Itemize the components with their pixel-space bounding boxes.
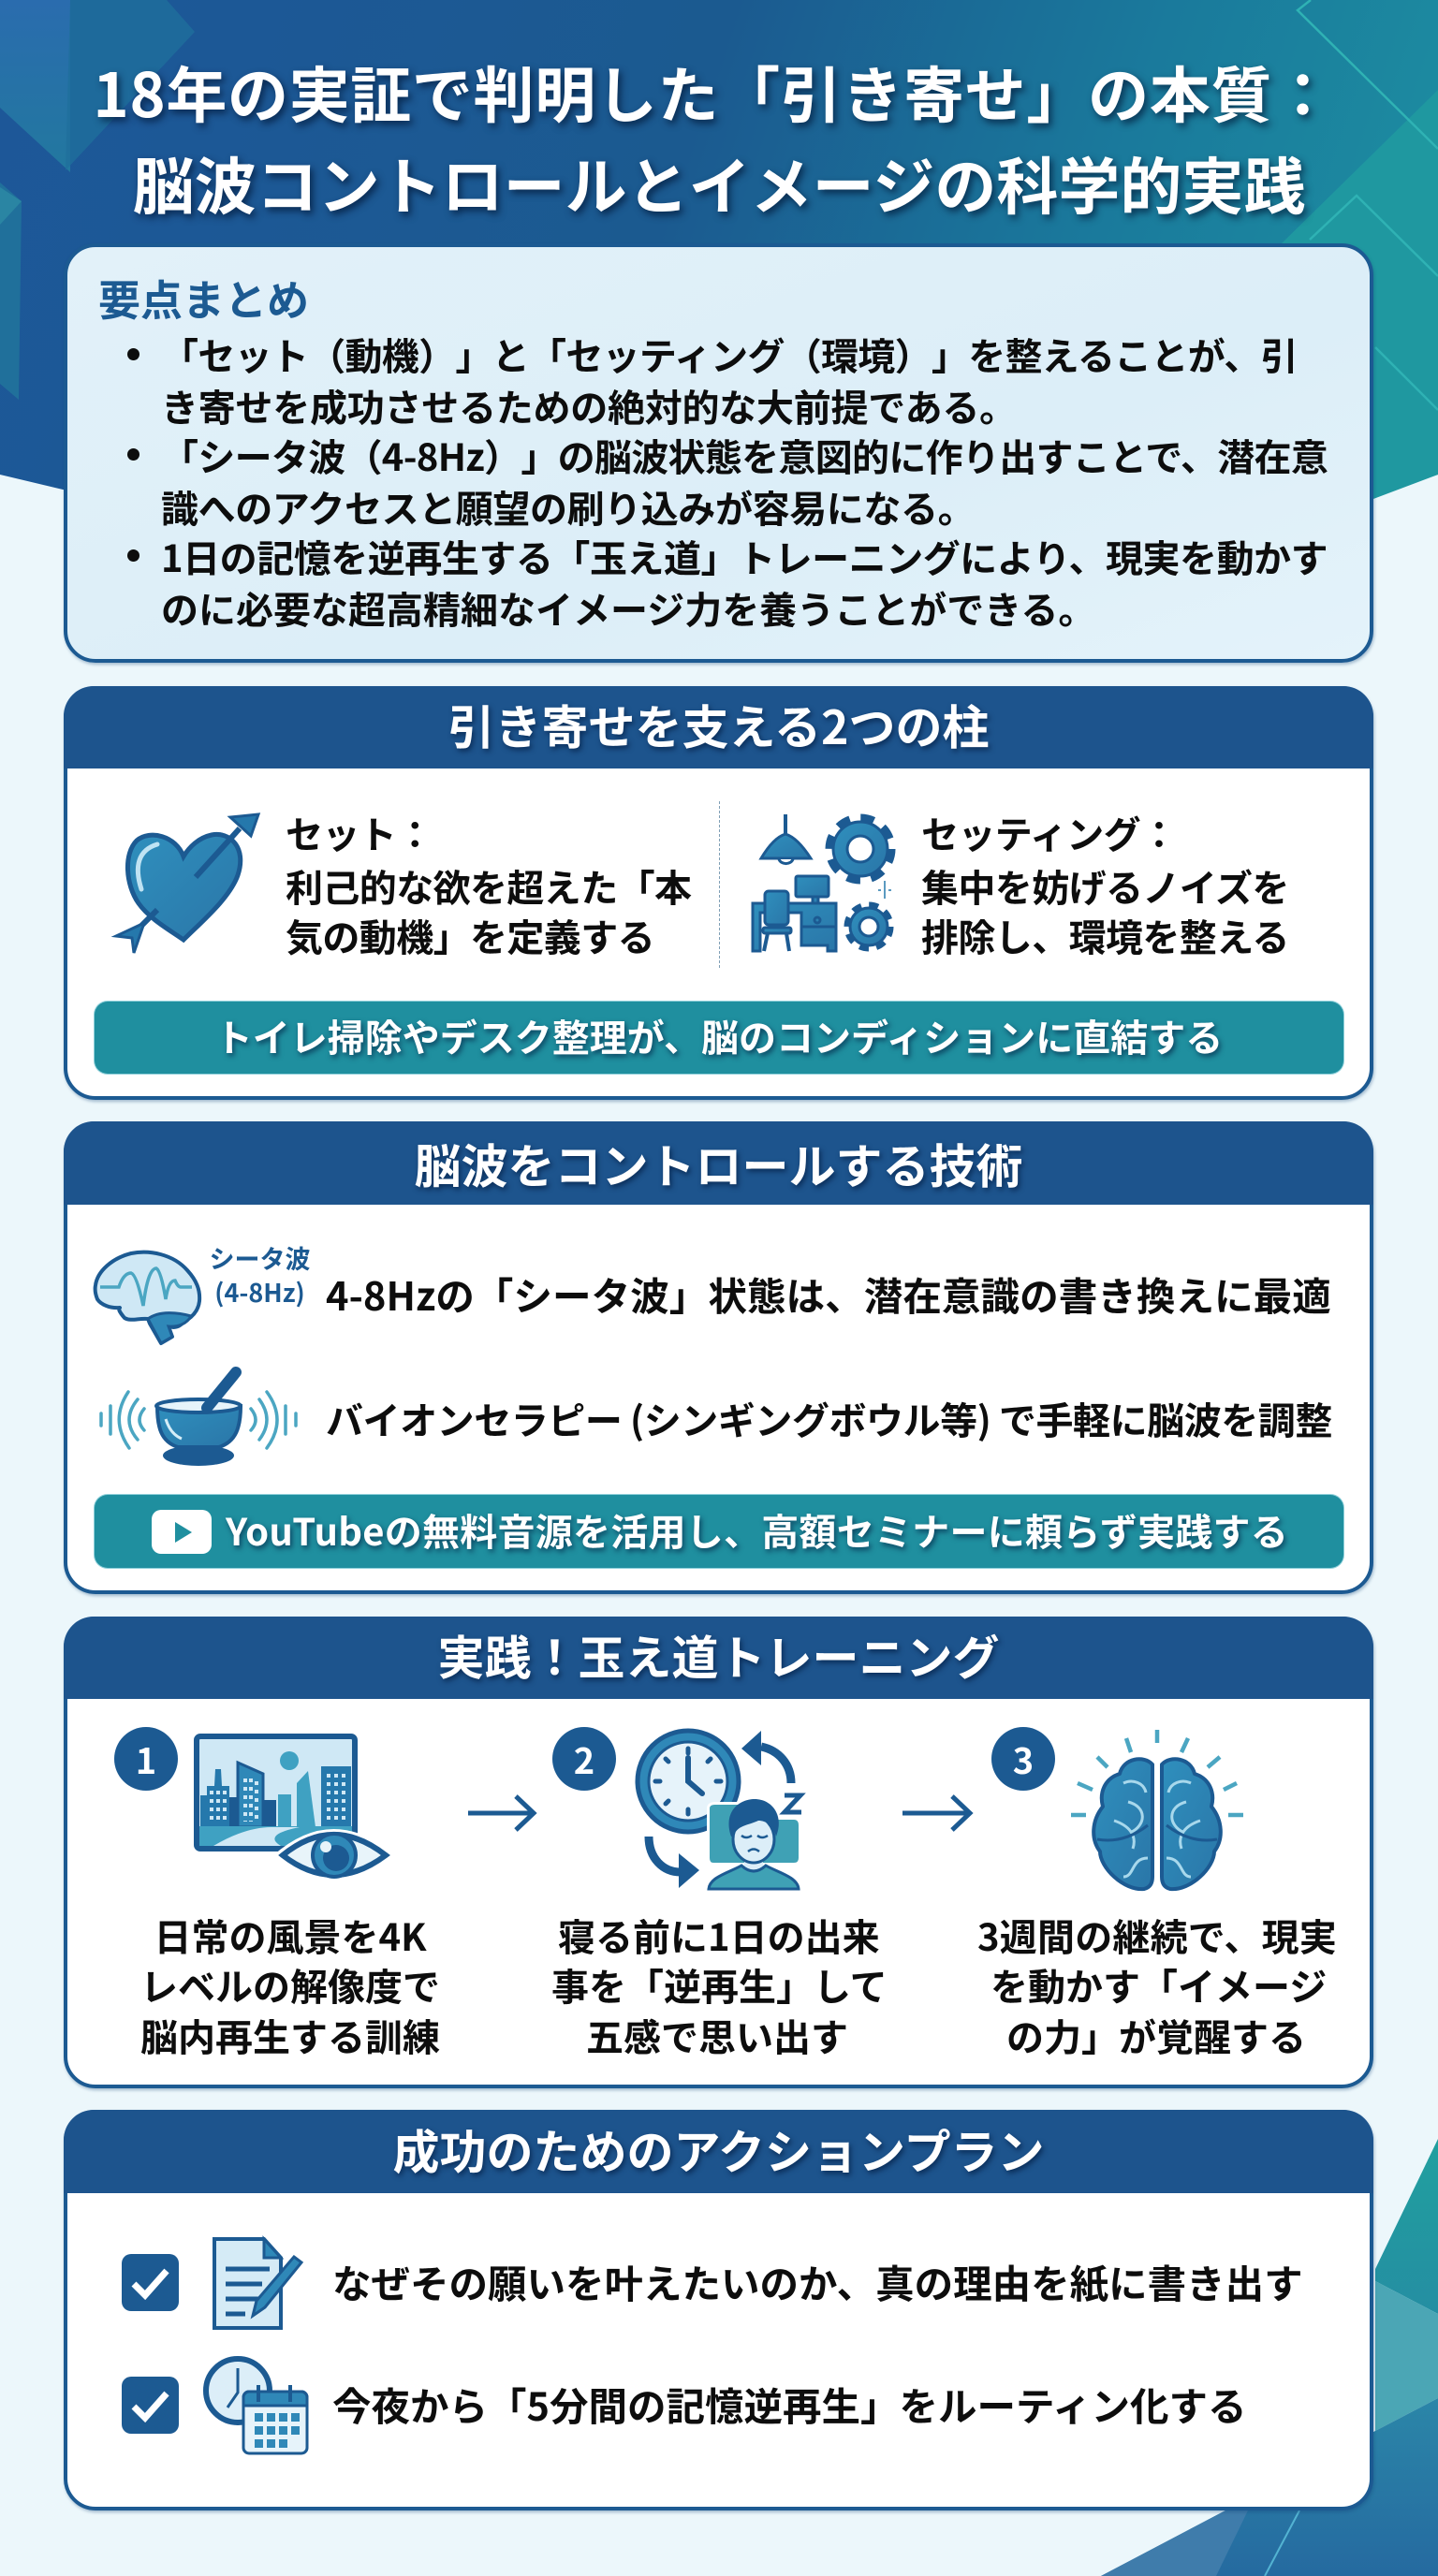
bullet list: 「シータ波（4-8Hz）」の脳波状態を意図的に作り出すことで、潜在意 xyxy=(161,428,1328,482)
badge 3: 3 xyxy=(1013,1733,1034,1784)
bullet list: 「セット（動機）」と「セッティング（環境）」を整えることが、引 xyxy=(161,327,1298,381)
pillar text: setting xyxy=(921,805,1289,962)
pillar text: set: 気の動機」を定義する xyxy=(286,908,654,962)
icon: play button xyxy=(152,1510,212,1554)
technique header: 脳波をコントロールする技術 xyxy=(414,1130,1022,1197)
action text 2: 今夜から「5分間の記憶逆再生」をルーティン化する xyxy=(332,2376,1247,2432)
pillar text: set: セット： xyxy=(286,805,433,859)
badge 2: 2 xyxy=(574,1733,594,1784)
title: 脳波コントロールとイメージの科学的実践 xyxy=(133,138,1305,227)
bullet list: のに必要な超高精細なイメージ力を養うことができる。 xyxy=(161,580,1095,635)
callout bar: cleaning: トイレ掃除やデスク整理が、脳のコンディションに直結する xyxy=(215,1008,1223,1062)
callout bar: youtube xyxy=(95,1495,1343,1568)
technique text: theta: 4-8Hzの「シータ波」状態は、潜在意識の書き換えに最適 xyxy=(326,1266,1331,1322)
checkbox 2 xyxy=(122,2377,179,2434)
step 3 text: を動かす「イメージ xyxy=(990,1957,1327,2012)
action text 1: なぜその願いを叶えたいのか、真の理由を紙に書き出す xyxy=(332,2253,1303,2309)
panel: two pillars xyxy=(64,686,1373,1100)
divider xyxy=(719,801,720,968)
title xyxy=(93,47,1334,227)
callout bar: youtube: YouTubeの無料音源を活用し、高額セミナーに頼らず実践する xyxy=(226,1502,1288,1557)
step 1 text: 日常の風景を4K xyxy=(154,1908,427,1962)
label: theta wave: シータ波 xyxy=(210,1239,311,1276)
badge 1: 1 xyxy=(136,1733,156,1784)
step 2 text xyxy=(551,1908,888,2062)
pillar text: setting: 集中を妨げるノイズを xyxy=(921,858,1289,913)
step 1 text: 脳内再生する訓練 xyxy=(140,2008,440,2062)
bullet list xyxy=(127,327,1328,635)
pillars header xyxy=(64,686,1373,768)
step 3 text: の力」が覚醒する xyxy=(1006,2008,1306,2062)
icon: desk and gears xyxy=(751,814,895,953)
panel: training steps xyxy=(64,1617,1373,2088)
step 3 text: 3週間の継続で、現実 xyxy=(977,1908,1337,1962)
bullet list: 1日の記憶を逆再生する「玉え道」トレーニングにより、現実を動かす xyxy=(161,529,1328,583)
action header: 成功のためのアクションプラン xyxy=(393,2115,1045,2183)
icon: document and pencil xyxy=(213,2235,303,2330)
training header: 実践！玉え道トレーニング xyxy=(438,1621,1000,1689)
icon: clock and sleeping person xyxy=(635,1728,806,1891)
panel: brainwave techniques xyxy=(64,1121,1373,1594)
action header xyxy=(64,2110,1373,2193)
label: theta wave: (4-8Hz) xyxy=(214,1273,305,1310)
summary heading: 要点まとめ xyxy=(98,267,309,328)
training header xyxy=(64,1617,1373,1699)
pillar text: set: 利己的な欲を超えた「本 xyxy=(286,858,691,913)
technique header xyxy=(64,1121,1373,1205)
callout bar: cleaning xyxy=(95,1002,1343,1074)
badge 1 xyxy=(114,1727,178,1791)
pillar text: setting: セッティング： xyxy=(921,805,1177,859)
pillars header: 引き寄せを支える2つの柱 xyxy=(448,691,989,758)
step 2 text: 五感で思い出す xyxy=(586,2008,848,2062)
step 1 text: レベルの解像度で xyxy=(140,1957,440,2012)
icon: singing bowl xyxy=(99,1367,298,1466)
arrow 2 xyxy=(902,1794,974,1832)
step 3 text xyxy=(977,1908,1337,2062)
step 1 text xyxy=(140,1908,440,2062)
panel: summary xyxy=(64,243,1373,663)
technique text: bion therapy: バイオンセラピー (シンギングボウル等) で手軽に脳波を調整 xyxy=(326,1391,1332,1445)
pillar text: setting: 排除し、環境を整える xyxy=(921,908,1289,962)
step 2 text: 寝る前に1日の出来 xyxy=(558,1908,880,1962)
badge 2 xyxy=(552,1727,616,1791)
icon: cityscape and eye xyxy=(194,1734,390,1879)
bullet list: き寄せを成功させるための絶対的な大前提である。 xyxy=(161,378,1017,432)
checkbox 1 xyxy=(122,2254,179,2311)
badge 3 xyxy=(991,1727,1055,1791)
panel: action plan xyxy=(64,2110,1373,2510)
icon: brain with wave xyxy=(94,1251,202,1346)
label: theta wave xyxy=(210,1239,311,1310)
icon: clock and calendar xyxy=(203,2356,309,2454)
arrow 1 xyxy=(468,1794,537,1832)
icon: glowing brain xyxy=(1071,1730,1243,1891)
title: 18年の実証で判明した「引き寄せ」の本質： xyxy=(93,47,1334,135)
bullet list: 識へのアクセスと願望の刷り込みが容易になる。 xyxy=(161,479,975,534)
icon: heart with arrow xyxy=(110,812,260,953)
step 2 text: 事を「逆再生」して xyxy=(551,1957,888,2012)
pillar text: set xyxy=(286,805,691,962)
